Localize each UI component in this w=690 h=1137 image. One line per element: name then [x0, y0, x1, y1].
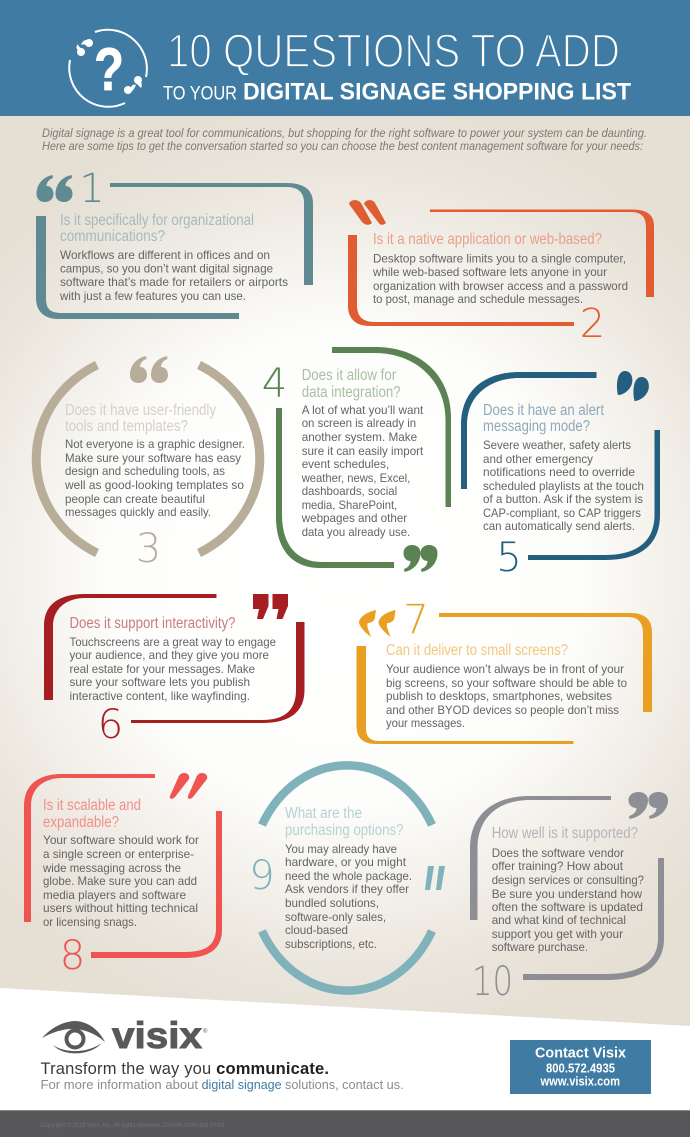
heading: Is it scalable and [43, 797, 141, 814]
body text: your messages. [386, 716, 465, 730]
logo: visix eye and wordmark: visix [112, 1015, 202, 1056]
number 10: 10 [472, 959, 513, 1005]
body text [285, 842, 412, 951]
body text: people can create beautiful [65, 492, 205, 506]
bracket frame [470, 796, 664, 980]
bracket frame [44, 594, 304, 723]
body text: or licensing snags. [43, 915, 137, 929]
body text: Your software should work for [43, 833, 199, 847]
body text [59, 248, 288, 303]
icon: quote mark [425, 866, 445, 890]
body text: with just a few features you can use. [59, 289, 246, 303]
body text [64, 437, 245, 519]
body text: need the whole package. [285, 869, 412, 883]
bracket frame [348, 210, 654, 326]
body text [492, 846, 644, 954]
contact line: digital signage [202, 1077, 282, 1092]
body text: bundled solutions, [285, 896, 379, 910]
logo: visix eye and wordmark: ® [203, 1028, 208, 1035]
number 6: 6 [98, 702, 123, 748]
intro text: Digital signage is a great tool for communications, but shopping for the right software to power your system can be daunting. [42, 126, 647, 140]
contact box: 800.572.4935 [546, 1062, 615, 1076]
body text: Severe weather, safety alerts [483, 438, 631, 452]
icon: quote mark [130, 356, 168, 383]
heading [285, 805, 404, 839]
body text: design services or consulting? [492, 873, 644, 887]
body text: software purchase. [492, 940, 588, 954]
number 3: 3 [136, 526, 161, 572]
tagline: Transform the way you communicate. [40, 1060, 329, 1078]
body text: sure your software lets you publish [70, 675, 250, 689]
body text [301, 403, 424, 539]
logo: visix eye and wordmark [42, 1015, 208, 1056]
body text: well as good-looking templates so [64, 478, 244, 492]
body text [372, 252, 628, 306]
body text: cloud-based [285, 923, 348, 937]
contact line: solutions, contact us. [285, 1077, 404, 1092]
body text: sure it can easily import [302, 444, 424, 458]
heading [483, 402, 605, 435]
bracket frame [36, 183, 313, 319]
heading: Does it allow for [302, 367, 396, 384]
number 7: 7 [403, 597, 429, 643]
body text: webpages and other [301, 511, 407, 525]
heading [60, 212, 254, 245]
header banner [0, 0, 690, 116]
icon: quote mark [617, 371, 649, 401]
heading: How well is it supported? [492, 825, 638, 842]
body text: offer training? How about [492, 859, 624, 873]
body text: Desktop software limits you to a single computer, [373, 252, 626, 266]
heading: expandable? [43, 814, 119, 831]
body text: and other emergency [483, 452, 593, 466]
icon: quote mark [253, 594, 288, 619]
contact box: Contact Visix [535, 1046, 626, 1062]
body text: notifications need to override [483, 465, 635, 479]
body text: software-only sales, [285, 910, 386, 924]
heading: Does it have user-friendly [65, 402, 216, 419]
number 5: 5 [496, 535, 522, 581]
body text: subscriptions, etc. [285, 937, 377, 951]
heading [65, 402, 216, 435]
body text: publish to desktops, smartphones, websites [386, 689, 612, 703]
body text: while web-based software lets anyone in your [372, 265, 607, 279]
icon: quote mark [359, 610, 396, 637]
icon: quote mark [170, 773, 207, 799]
number 2: 2 [580, 301, 605, 347]
number 8: 8 [60, 933, 85, 979]
panel: question 1 [36, 166, 313, 319]
body text: campus, so you don’t want digital signage [60, 262, 273, 276]
body text: Does the software vendor [492, 846, 624, 860]
circle frame [36, 365, 260, 553]
body text: often the software is updated [492, 900, 643, 914]
body text: dashboards, social [302, 484, 397, 498]
body text: support you get with your [492, 927, 623, 941]
body text: Workflows are different in offices and on [60, 248, 270, 262]
heading: Does it have an alert [483, 402, 605, 419]
number 1: 1 [79, 166, 105, 212]
bracket frame [461, 372, 660, 560]
heading: communications? [60, 228, 165, 245]
body text: big screens, so your software should be able to [386, 676, 627, 690]
panel: question 4 [262, 347, 451, 572]
subtitle: TO YOUR [163, 84, 237, 104]
number 9: 9 [249, 853, 275, 899]
body text: media players and software [43, 888, 186, 902]
subtitle: DIGITAL SIGNAGE SHOPPING LIST [243, 78, 631, 106]
heading: messaging mode? [483, 418, 590, 435]
body text: data you already use. [302, 525, 410, 539]
footer white area [0, 988, 690, 1111]
heading [43, 797, 141, 831]
bracket frame [24, 774, 222, 958]
intro text [42, 126, 647, 153]
body text: You may already have [285, 842, 397, 856]
body text: Be sure you understand how [492, 887, 642, 901]
body text: Your audience won’t always be in front of your [386, 662, 624, 676]
body text: to post, manage and schedule messages. [373, 292, 583, 306]
panel: question 10 [470, 792, 668, 1005]
body text: CAP-compliant, so CAP triggers [483, 506, 641, 520]
body text: of a button. Ask if the system is [483, 492, 643, 506]
contact line [40, 1077, 404, 1092]
number 4: 4 [262, 361, 287, 407]
body text: can automatically send alerts. [483, 519, 635, 533]
body text: Make sure your software has easy [65, 451, 241, 465]
body text [70, 635, 276, 703]
intro text: Here are some tips to get the conversation started so you can choose the best content management software for your needs: [42, 139, 643, 153]
body text: on screen is already in [302, 416, 416, 430]
body text: wide messaging across the [42, 861, 181, 875]
panel: question 8 [24, 773, 222, 979]
panel: question 7 [356, 597, 652, 744]
body text: design and scheduling tools, as [65, 464, 225, 478]
icon: quote mark [628, 792, 668, 819]
panel: question 6 [44, 594, 304, 748]
icon: question mark in speech circle: ? [94, 36, 124, 103]
icon: question mark in speech circle [69, 30, 147, 107]
body text: software that’s made for retailers or airports [60, 275, 288, 289]
body text: and other BYOD devices so people don’t miss [386, 703, 619, 717]
body text: event schedules, [302, 457, 389, 471]
panel: question 2 [348, 200, 654, 347]
contact box [510, 1040, 651, 1094]
body text: users without hitting technical [43, 901, 198, 915]
body text: and what kind of technical [492, 913, 626, 927]
body text: media, SharePoint, [302, 498, 397, 512]
body text: organization with browser access and a password [373, 279, 628, 293]
body text [483, 438, 644, 533]
circle frame [262, 765, 432, 991]
icon: quote mark [349, 200, 386, 225]
body text: hardware, or you might [285, 855, 407, 869]
panel: question 9 [249, 765, 445, 991]
body text: real estate for your messages. Make [70, 662, 255, 676]
body text: messages quickly and easily. [65, 505, 211, 519]
body text [386, 662, 627, 730]
body text: globe. Make sure you can add [43, 874, 197, 888]
bracket frame [276, 347, 451, 568]
panel: question 3 [36, 356, 260, 572]
body text: A lot of what you’ll want [302, 403, 424, 417]
body text: another system. Make [302, 430, 418, 444]
body text: a single screen or enterprise- [43, 847, 194, 861]
icon: quote mark [36, 175, 72, 202]
panel: question 5 [461, 371, 660, 581]
heading: tools and templates? [65, 418, 188, 435]
heading: Can it deliver to small screens? [386, 642, 568, 659]
title: 10 QUESTIONS TO ADD [167, 24, 620, 77]
footer bar [0, 1110, 690, 1137]
body text: weather, news, Excel, [301, 471, 410, 485]
icon: quote mark [404, 545, 438, 572]
heading: What are the [285, 805, 362, 822]
body text: Ask vendors if they offer [285, 882, 409, 896]
body text: scheduled playlists at the touch [483, 479, 644, 493]
body text [42, 833, 199, 929]
bracket frame [356, 613, 652, 744]
contact line: For more information about [40, 1077, 198, 1092]
body text: Not everyone is a graphic designer. [65, 437, 245, 451]
heading: Does it support interactivity? [70, 615, 236, 632]
body text: your audience, and they give you more [70, 648, 269, 662]
contact box: www.visix.com [540, 1074, 620, 1088]
heading: Is it a native application or web-based? [373, 231, 602, 248]
body text: interactive content, like wayfinding. [70, 689, 250, 703]
heading: Is it specifically for organizational [60, 212, 254, 229]
heading: purchasing options? [285, 822, 404, 839]
body text: Touchscreens are a great way to engage [70, 635, 276, 649]
copyright: Copyright © 2016 Visix, Inc. All rights reserved. D-MAR-0000-168 07/16 [40, 1122, 225, 1129]
heading [302, 367, 401, 401]
heading: data integration? [302, 384, 401, 401]
